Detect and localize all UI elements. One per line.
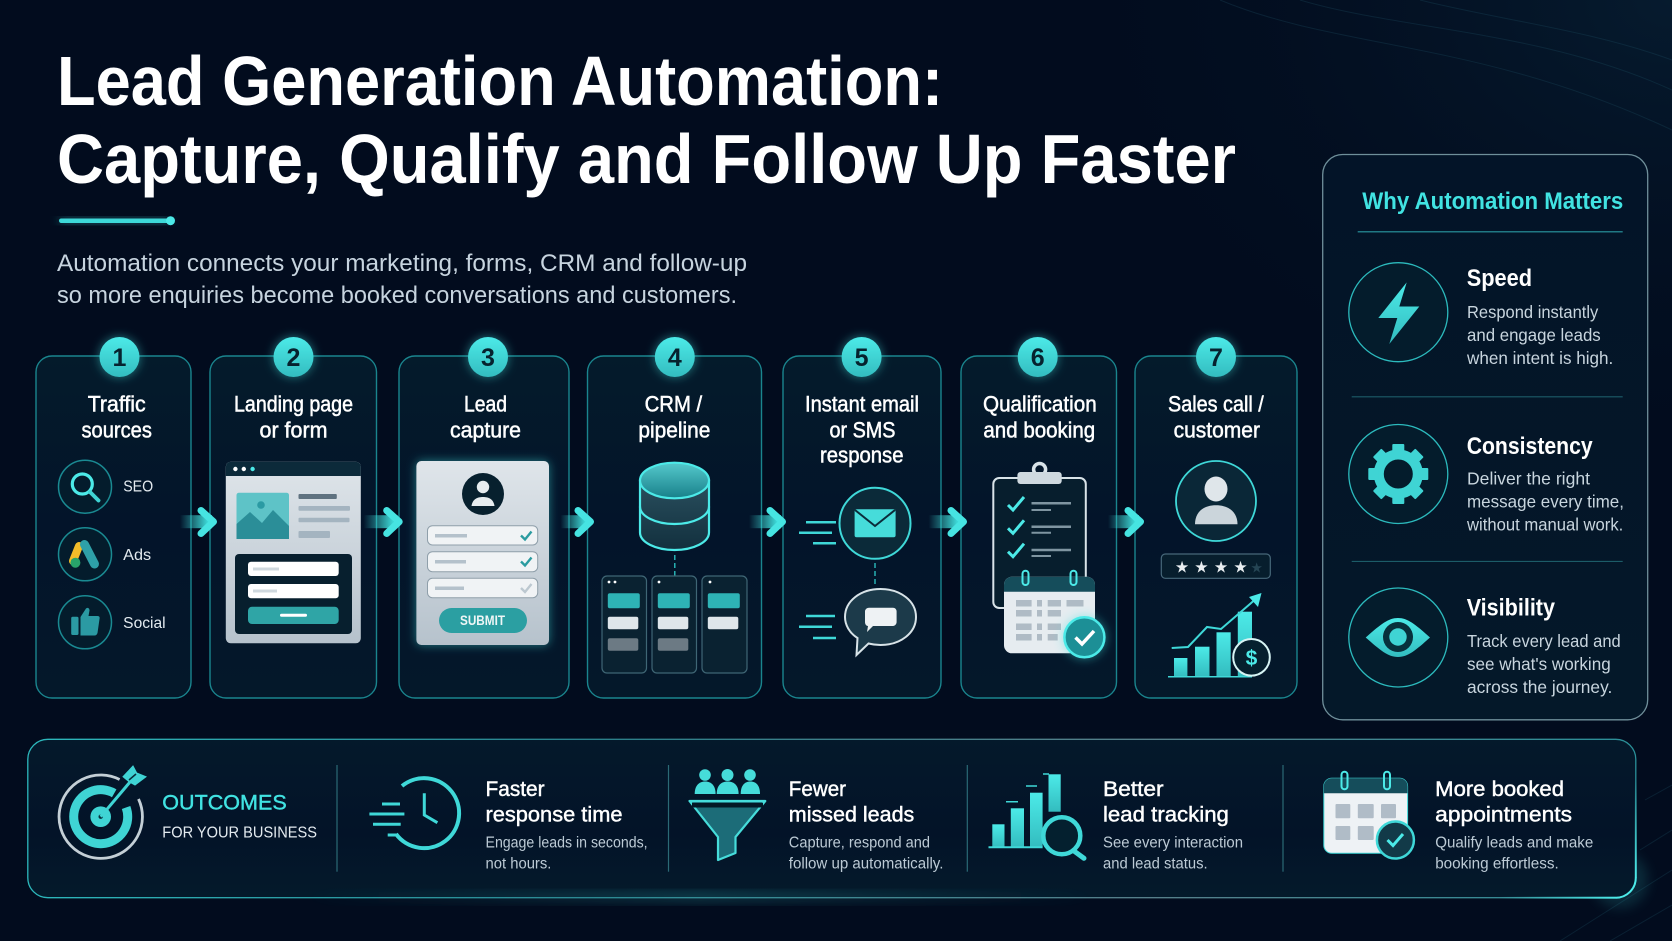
panel: step 4 CRM pipeline [588,337,762,698]
arrow: step 4 to 5 [749,510,782,534]
outcome: more booked appointments: booking effortless. [1435,855,1559,872]
panel: step 5 instant email or SMS: or SMS [830,417,896,442]
item: visibility: across the journey. [1467,677,1612,697]
icon: growth chart: $ [1246,647,1258,670]
icon: SEO magnifier [58,460,112,513]
panel: step 4 CRM pipeline: 4 [668,344,682,372]
item: consistency: Deliver the right [1467,468,1590,488]
outcome: fewer missed leads [690,769,943,872]
icon: email circle [799,488,910,559]
heading: outcomes: OUTCOMES [162,791,287,814]
outcome: better lead tracking: and lead status. [1103,855,1208,872]
panel: step 6 qualification and booking [961,337,1116,698]
outcome: fewer missed leads: Fewer [789,777,846,801]
item: consistency [1349,424,1624,534]
item: speed: Speed [1467,265,1532,292]
title: Capture, Qualify and Follow Up Faster [57,120,1236,198]
panel: step 1 traffic sources: Ads [123,547,151,564]
panel: why automation matters [1323,154,1648,720]
panel: step 7 sales call or customer: 7 [1209,344,1223,372]
title: Lead Generation Automation: [57,42,943,120]
outcome: faster response time: Engage leads in seconds, [486,835,648,852]
panel: step 1 traffic sources: SEO [123,479,153,496]
panel: step 2 landing page or form: or form [260,417,328,442]
icon: target with arrow [59,766,146,858]
outcome: faster response time: not hours. [486,855,551,872]
subtitle: so more enquiries become booked conversations and customers. [57,282,737,309]
icon: database cylinder [640,463,709,550]
panel: step 1 traffic sources: 1 [113,344,127,372]
panel: step 5 instant email or SMS: response [820,443,904,468]
panel: step 4 CRM pipeline: CRM / [645,392,703,417]
outcome: faster response time [369,777,648,872]
star rating: ★ [1214,560,1228,576]
panel: step 7 sales call or customer [1135,337,1297,698]
star rating: ★ [1175,560,1189,576]
panel: step 5 instant email or SMS: Instant email [805,392,919,417]
panel: step 1 traffic sources: Social [123,615,166,632]
icon: clipboard checklist [993,464,1086,608]
panel: step 7 sales call or customer: customer [1174,417,1260,442]
item: visibility: Track every lead and [1467,631,1621,651]
icon: calendar with check [1004,571,1104,657]
star rating: ★ [1194,560,1209,576]
outcome: better lead tracking: lead tracking [1103,802,1229,826]
icon: growth chart [1168,593,1270,677]
star rating: ★ [1233,560,1248,576]
panel: step 3 lead capture: 3 [481,344,495,372]
panel: step 2 landing page or form: Landing page [234,392,353,417]
icon: chat bubble [799,589,916,655]
outcome: better lead tracking: See every interaction [1103,835,1243,852]
outcome: fewer missed leads: missed leads [789,802,914,826]
item: consistency: without manual work. [1466,514,1623,534]
panel: step 2 landing page or form [210,337,376,698]
item: visibility: Visibility [1467,595,1556,622]
item: visibility: see what's working [1467,654,1611,674]
outcome: fewer missed leads: Capture, respond and [789,835,930,852]
item: consistency: message every time, [1467,491,1624,511]
panel: step 7 sales call or customer: Sales call / [1168,392,1265,417]
star rating [1161,554,1270,578]
outcome: more booked appointments: Qualify leads and make [1435,835,1593,852]
illustration: lead capture form [416,461,549,645]
outcome: more booked appointments: More booked [1435,777,1564,801]
subtitle: Automation connects your marketing, forms, CRM and follow-up [57,250,747,277]
panel: step 1 traffic sources: Traffic [88,392,146,417]
panel: step 6 qualification and booking: and booking [983,417,1095,442]
kanban board [602,576,747,673]
title accent line [59,216,175,225]
outcome: faster response time: Faster [486,777,545,801]
item: speed: when intent is high. [1466,348,1613,368]
outcome: more booked appointments: appointments [1435,802,1572,826]
star rating: ★ [1250,560,1263,576]
illustration: lead capture form: SUBMIT [460,613,506,628]
icon: customer avatar [1176,461,1256,541]
panel: step 5 instant email or SMS [783,337,941,698]
outcome: faster response time: response time [486,802,622,826]
panel: step 4 CRM pipeline: pipeline [638,417,710,442]
icon: ads logo [58,528,112,581]
panel: step 5 instant email or SMS: 5 [855,344,869,372]
panel: step 6 qualification and booking: Qualification [983,392,1097,417]
outcome: more booked appointments [1324,772,1593,872]
panel: step 1 traffic sources [36,337,191,698]
heading: outcomes [162,791,317,841]
item: consistency: Consistency [1467,433,1593,460]
illustration: browser landing page [226,462,361,643]
panel: step 2 landing page or form: 2 [287,344,300,372]
outcome: fewer missed leads: follow up automatically. [789,855,943,872]
panel: step 1 traffic sources: sources [82,417,152,442]
arrow: step 3 to 4 [561,510,590,534]
title [57,42,1236,198]
heading: why automation matters: Why Automation Matters [1362,188,1623,215]
item: visibility [1349,588,1621,697]
arrow: step 5 to 6 [929,510,964,534]
panel: step 6 qualification and booking: 6 [1031,344,1045,372]
panel: step 3 lead capture [399,337,569,698]
panel: step 3 lead capture: Lead [464,392,507,417]
heading: outcomes: FOR YOUR BUSINESS [162,824,317,841]
item: speed [1349,263,1613,368]
panel: outcomes bar [28,739,1648,908]
arrow: step 6 to 7 [1108,510,1140,534]
arrow: step 1 to 2 [180,510,214,534]
outcome: better lead tracking [988,774,1243,872]
panel: step 3 lead capture: capture [450,417,521,442]
arrow: step 2 to 3 [364,510,399,534]
item: speed: and engage leads [1467,325,1601,345]
subtitle [57,250,747,309]
outcome: better lead tracking: Better [1103,777,1164,801]
item: speed: Respond instantly [1467,302,1599,322]
icon: social thumbs up [58,596,112,649]
